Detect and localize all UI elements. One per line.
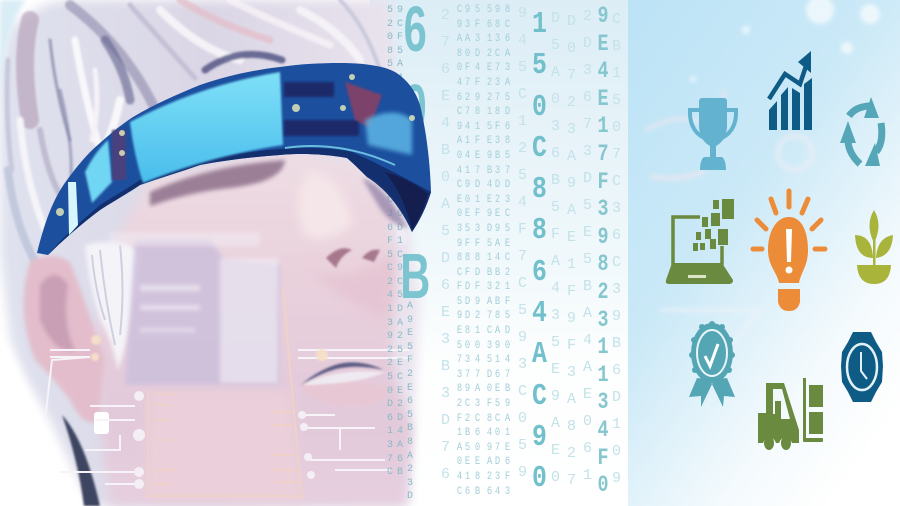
- visor cyan streak: [285, 146, 395, 165]
- reflection beside nose: [362, 178, 408, 228]
- icon: gear clock: [841, 332, 883, 402]
- data column: faint digits three: D5A036B5FA435E9AE0: [551, 10, 560, 486]
- orange dots near lips: [91, 335, 328, 361]
- lips: [300, 362, 388, 406]
- chin pink panel: [148, 392, 300, 500]
- visor band: [37, 63, 431, 255]
- circuit lines on chin: [148, 290, 302, 500]
- ear: [24, 256, 105, 422]
- data column: faint digits four: D0723A9AE1F9F3A827: [567, 13, 576, 489]
- panel: central data background: [370, 0, 628, 506]
- visor dark blocks: [112, 82, 359, 180]
- hair mass: [0, 0, 420, 506]
- data column: tiny digits one: 520857A0394E11C36F5C241392250D6137C: [387, 5, 393, 478]
- data column: small digits six: 8C6A3A5D6857D3C5EC21F5D047B9A1E6F3: [505, 4, 510, 498]
- white hair over cheek: [85, 242, 140, 370]
- panel: right sky background: [628, 0, 900, 506]
- face skin: [95, 150, 412, 506]
- visor dark lower rim: [48, 148, 431, 255]
- data column: medium digits one: 150C8864AC90: [532, 7, 547, 496]
- icon: forklift: [758, 378, 823, 450]
- pale data overlay blocks: [110, 232, 278, 383]
- icon: trophy: [690, 98, 736, 170]
- data column: small digits five: 983C7378F3B3D2E9A4B2B8A916E5C07D34: [495, 4, 500, 498]
- icon: light bulb with exclamation: [753, 191, 825, 311]
- dark hair behind neck: [62, 415, 100, 506]
- hair strands: [7, 0, 402, 270]
- nose highlight: [299, 170, 352, 238]
- visor right glow: [365, 112, 412, 155]
- visor: [37, 63, 431, 255]
- bottom left white fade: [0, 320, 95, 506]
- icon: plant in pot: [855, 210, 893, 284]
- eye shadow under visor: [150, 160, 285, 206]
- circuit nodes: [133, 391, 315, 489]
- visor small panel: [85, 140, 112, 203]
- data column: faint digits six: CB1507C36C39B6D109: [612, 11, 621, 487]
- nose shadow: [305, 240, 396, 320]
- data column: faint digits five: 2D3673D5E5BA4AE061: [583, 8, 592, 484]
- data overlay panel on cheek: [125, 240, 280, 385]
- data column: tiny digits three: A9E5F2E65B8A23D: [407, 301, 413, 502]
- white circuit traces: [45, 350, 410, 484]
- visor white glint: [68, 182, 78, 235]
- top left sky corner: [0, 0, 26, 100]
- ear stud: [94, 412, 109, 434]
- icon: laptop with pixels: [666, 199, 734, 284]
- visor lower right reflection: [385, 172, 428, 230]
- visor bright panel: [130, 72, 283, 183]
- icon: recycle arrows: [840, 97, 882, 166]
- data column: faint digits: 276E4B0A5D6E3B3D76: [441, 7, 450, 483]
- data column: small digits four: 5612E2215E9B4E9D51B3A7C35D0F849A26: [487, 4, 492, 498]
- inner ear: [40, 275, 75, 351]
- data column: medium digits two: 9E4E17F398231134F0: [597, 3, 609, 498]
- icon: rising bar chart: [769, 51, 812, 130]
- data column: tiny digits two: 9CF5A403F86945C0D1C9C5DA25ECE2D4A6B: [397, 5, 403, 478]
- data column: small digits one: C9A8046C9A04CE0398CF59E57382F1A04C: [457, 4, 462, 498]
- cheek hair streaks: [92, 245, 122, 345]
- data column: small digits three: 5F3D4F981FE7D1F3F8DF921047A3C60E8B: [475, 4, 480, 498]
- visor red reflection: [345, 82, 382, 128]
- icon: award ribbon: [689, 321, 735, 407]
- cloud highlights: [645, 0, 880, 360]
- visor light dots: [56, 74, 415, 216]
- nostrils: [326, 248, 380, 268]
- data column: small digits two: 93A0F727414190E5F8FDDD80379C2B5E16: [465, 4, 470, 498]
- data column: faint digits two: 945C1254F7C593C059: [518, 5, 527, 481]
